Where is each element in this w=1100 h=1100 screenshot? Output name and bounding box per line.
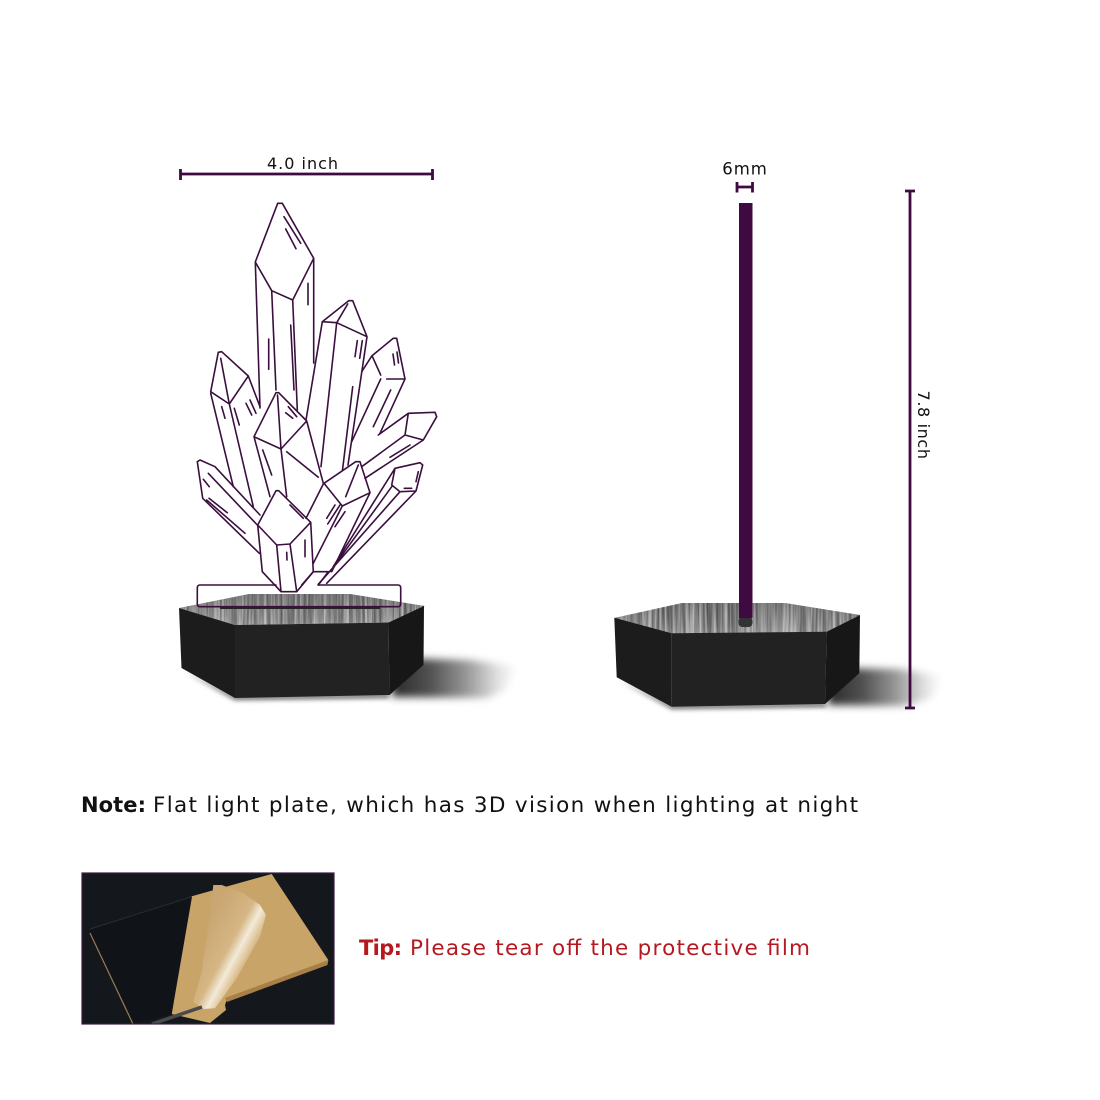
width dimension: 4.0 inch xyxy=(180,154,432,180)
left lamp base with shadow xyxy=(170,585,517,700)
crystal: tall centre xyxy=(255,203,314,410)
note text: Note: xyxy=(81,793,146,817)
crystal: right tall xyxy=(306,301,367,470)
crystal: middle xyxy=(254,393,323,497)
acrylic plate outline xyxy=(197,585,401,607)
crystal: front xyxy=(258,491,313,592)
height dimension: 7.8 inch: 7.8 inch xyxy=(914,390,933,459)
thickness dimension: 6mm xyxy=(722,160,767,192)
crystal line drawing on acrylic plate xyxy=(197,203,437,607)
crystal: lower centre right xyxy=(302,462,370,585)
crystal: right pointing xyxy=(362,412,437,478)
crystal: left upper xyxy=(211,352,260,507)
height dimension: 7.8 inch xyxy=(905,191,933,708)
crystal: lower right xyxy=(318,463,423,584)
photo: peeling protective film xyxy=(82,873,334,1024)
thickness dimension: 6mm: 6mm xyxy=(722,160,767,178)
tip text: Tip: xyxy=(359,936,402,960)
crystal: right upper small xyxy=(352,338,405,442)
side-view lamp base with shadow xyxy=(605,595,942,709)
crystal: lower left xyxy=(197,460,260,553)
tip text: Please tear off the protective film xyxy=(410,936,810,961)
note text: Flat light plate, which has 3D vision when lighting at night xyxy=(153,793,858,818)
width dimension: 4.0 inch: 4.0 inch xyxy=(267,154,338,173)
side-view acrylic plate xyxy=(738,203,752,627)
